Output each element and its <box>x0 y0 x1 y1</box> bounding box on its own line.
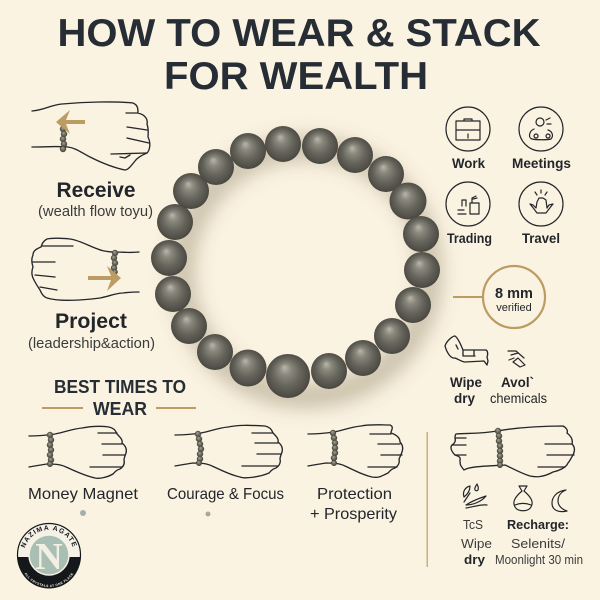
wipe dry icon <box>445 336 488 365</box>
speck under courage and focus <box>206 512 210 516</box>
work label: Work <box>452 155 485 171</box>
project caption: (leadership&action) <box>28 336 155 352</box>
leaf and drops icon <box>463 484 487 508</box>
money magnet hand icon <box>29 426 126 478</box>
bracelet <box>151 126 440 398</box>
crescent moon icon <box>552 490 567 512</box>
avoid chemicals icon <box>508 351 525 367</box>
recharge text block: dry <box>464 552 486 567</box>
travel label: Travel <box>522 230 560 246</box>
avoid chemicals label <box>490 374 547 406</box>
recharge text block: Moonlight 30 min <box>495 552 583 567</box>
title <box>58 12 540 98</box>
double hand with bracelet <box>451 426 574 477</box>
wipe dry label: Wipe <box>450 374 482 390</box>
trading icon <box>446 182 490 226</box>
recharge text block: Wipe <box>461 536 492 551</box>
size callout: 8 mm <box>495 286 533 302</box>
project heading: Project <box>55 310 127 333</box>
size callout <box>453 266 545 328</box>
recharge text block: Recharge: <box>507 517 569 532</box>
logo badge: ALL CRYSTALS AT ONE PLACE <box>24 572 74 587</box>
recharge text block <box>461 517 583 567</box>
protection hand icon <box>308 425 403 477</box>
best times heading: BEST TIMES TO <box>54 377 186 397</box>
column divider <box>426 432 428 567</box>
logo badge <box>16 522 82 588</box>
protection label <box>310 486 397 523</box>
travel icon <box>519 182 563 226</box>
receive caption: (wealth flow toyu) <box>38 204 153 220</box>
receive hand icon <box>32 102 150 170</box>
avoid chemicals label: Avol` <box>501 374 534 390</box>
best times heading <box>42 377 196 419</box>
work icon <box>446 107 490 151</box>
title: FOR WEALTH <box>164 55 428 98</box>
size callout: verified <box>496 302 532 314</box>
wipe dry label: dry <box>454 390 475 406</box>
best times heading: WEAR <box>93 399 147 419</box>
logo badge: NAZIMA AGATE <box>20 526 77 548</box>
recharge text block: Selenits/ <box>511 536 565 551</box>
money magnet label: Money Magnet <box>28 486 139 503</box>
wipe dry label <box>450 374 482 406</box>
avoid chemicals label: chemicals <box>490 391 547 406</box>
project hand icon <box>32 238 139 300</box>
recharge text block: TcS <box>463 517 483 532</box>
trading label: Trading <box>447 230 492 246</box>
moon water vessel icon <box>514 486 532 511</box>
title: HOW TO WEAR & STACK <box>58 12 540 55</box>
courage and focus hand icon <box>175 425 282 478</box>
meetings icon <box>519 107 563 151</box>
protection label: + Prosperity <box>310 506 397 523</box>
speck under money magnet <box>80 510 86 516</box>
receive heading: Receive <box>56 179 136 202</box>
meetings label: Meetings <box>512 155 571 171</box>
protection label: Protection <box>317 486 392 503</box>
logo badge: N <box>35 536 63 578</box>
courage and focus label: Courage & Focus <box>167 486 284 503</box>
